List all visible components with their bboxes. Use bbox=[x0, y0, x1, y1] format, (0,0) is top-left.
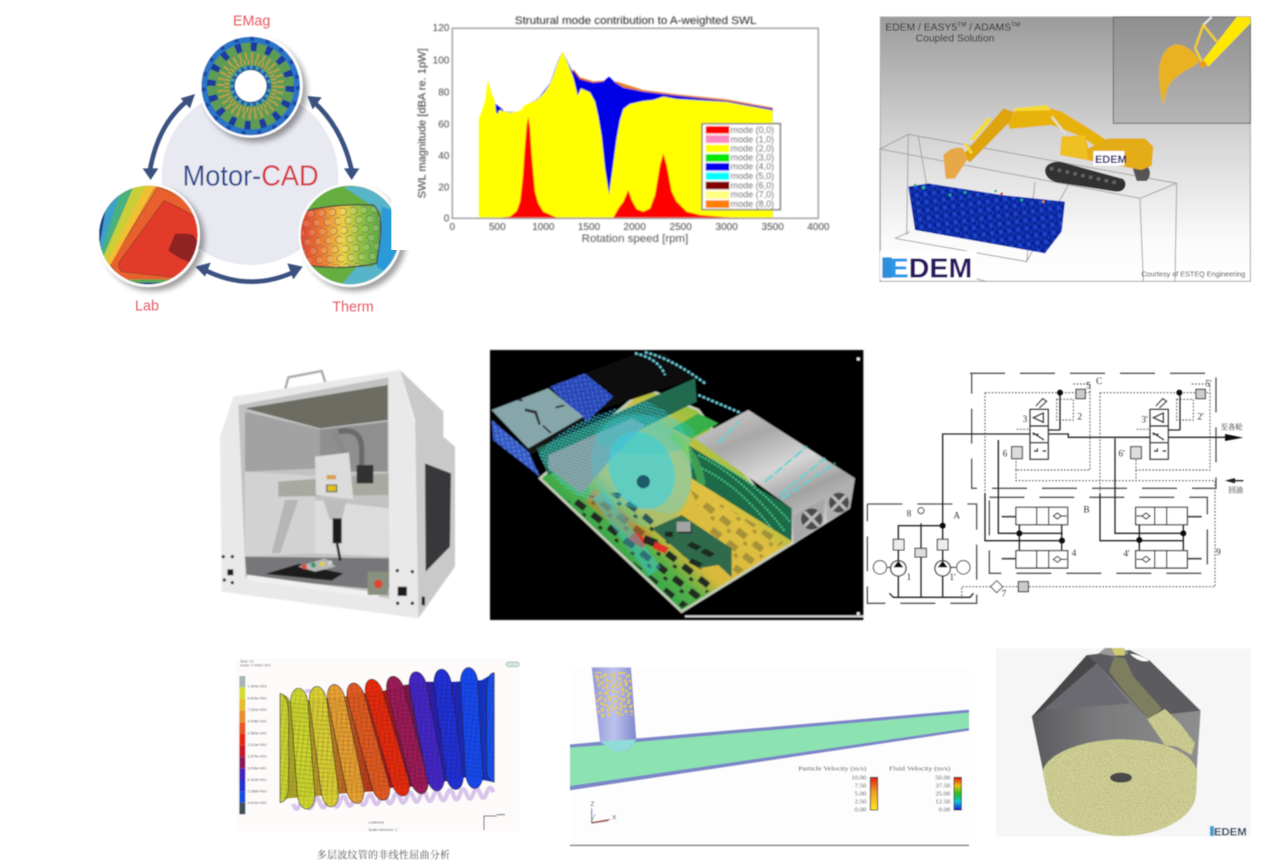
particle velocity legend: 2.50 bbox=[855, 798, 867, 805]
panel: Motor-CAD triangle diagram bbox=[97, 13, 402, 315]
title text: TM bbox=[957, 21, 966, 28]
x axis labels: 500 bbox=[489, 222, 506, 233]
falling particles bbox=[1147, 709, 1195, 755]
color legend: 4.583e+002 bbox=[247, 731, 267, 735]
schematic labels: 8 bbox=[907, 510, 912, 520]
schematic labels: 1 bbox=[907, 573, 912, 583]
legend: mode (2,0) bbox=[731, 143, 774, 153]
bellows coil bbox=[280, 667, 494, 810]
particle velocity legend: 10.00 bbox=[851, 774, 867, 781]
dark red mode layer bbox=[573, 70, 610, 83]
inlet stream bbox=[1109, 657, 1162, 720]
legend: mode (4,0) bbox=[731, 162, 774, 172]
dark top chamber bbox=[585, 352, 742, 413]
cabinet side bbox=[400, 370, 455, 618]
legend bbox=[702, 124, 780, 210]
pumps bbox=[873, 389, 1205, 593]
panel: bellows FEA result bbox=[236, 658, 519, 861]
side window bbox=[425, 463, 451, 572]
schematic labels bbox=[907, 377, 1221, 600]
color legend: 5.208e+001 bbox=[247, 766, 267, 770]
credit: Courtesy of ESTEQ Engineering bbox=[1141, 272, 1245, 279]
cylinder rods bbox=[1002, 517, 1202, 559]
schematic labels: 7 bbox=[1002, 590, 1007, 600]
color legend: 1.875e+002 bbox=[247, 755, 267, 759]
particle velocity legend: 7.50 bbox=[855, 782, 867, 789]
excavator bbox=[943, 105, 1153, 192]
schematic labels: 1' bbox=[949, 573, 956, 583]
schematic labels: 6 bbox=[1003, 450, 1008, 460]
panel: silo filling with particles bbox=[996, 648, 1251, 839]
Chinese label: return oil: 回油 bbox=[1228, 486, 1244, 495]
x axis labels: 4000 bbox=[807, 222, 830, 233]
color legend: 2.188e+002 bbox=[247, 790, 267, 794]
translucent card wall bbox=[537, 378, 697, 475]
gradient background bbox=[880, 17, 1250, 281]
dashed enclosures bbox=[867, 373, 1216, 603]
particles bbox=[594, 672, 633, 717]
daughter card bbox=[643, 515, 732, 577]
legend: mode (1,0) bbox=[731, 134, 774, 144]
fan icon right bbox=[829, 493, 849, 513]
pale plate bbox=[236, 658, 519, 832]
Chinese label: to wheels: 至各轮 bbox=[1221, 422, 1243, 431]
color legend: 5.938e+002 bbox=[247, 720, 267, 724]
y axis labels: 120 bbox=[433, 23, 450, 34]
valves bbox=[1030, 399, 1168, 459]
particle bed bbox=[908, 183, 1065, 253]
y axis labels: 20 bbox=[438, 182, 450, 193]
y axis title: SWL magnitude [dBA re. 1pW] bbox=[416, 48, 428, 198]
color legend bbox=[239, 676, 267, 814]
circuit board bbox=[540, 388, 795, 612]
fluid velocity legend: 37.50 bbox=[935, 782, 951, 789]
legend: mode (8,0) bbox=[731, 199, 774, 209]
schematic labels: 2' bbox=[1197, 412, 1204, 422]
legend: mode (7,0) bbox=[731, 190, 774, 200]
wireframe bin bbox=[880, 134, 1177, 282]
footer text bbox=[368, 820, 397, 832]
gantry beam bbox=[278, 473, 388, 497]
colored workpieces bbox=[298, 558, 336, 572]
schematic labels: C bbox=[1096, 377, 1102, 387]
y axis labels: 60 bbox=[438, 120, 450, 131]
blue flow region bbox=[550, 373, 613, 423]
junction dots bbox=[940, 390, 1186, 544]
x axis title: Rotation speed [rpm] bbox=[582, 233, 688, 245]
chart title: Strutural mode contribution to A-weighted SWL bbox=[515, 15, 756, 27]
fan wall bbox=[688, 445, 792, 541]
x axis labels: 3000 bbox=[716, 222, 738, 233]
central hole bbox=[1110, 773, 1132, 783]
schematic labels: 3' bbox=[1141, 416, 1148, 426]
schematic labels: 9 bbox=[1216, 548, 1221, 558]
circle: EMag motor cross-section bbox=[199, 34, 302, 138]
y axis labels: 40 bbox=[438, 151, 450, 162]
logo chip bbox=[506, 662, 519, 667]
label: EMag: EMag bbox=[233, 13, 270, 29]
cylinder wall bbox=[1032, 698, 1201, 797]
pilot lines bbox=[962, 384, 1215, 598]
panel: gantry dispensing machine photo bbox=[220, 370, 455, 618]
junction bbox=[600, 739, 636, 752]
power supply units bbox=[695, 410, 855, 545]
x axis labels: 1000 bbox=[532, 222, 555, 233]
color legend: 8.333e+001 bbox=[247, 778, 267, 782]
cable and head bbox=[338, 431, 362, 473]
bottom rule bbox=[570, 845, 969, 846]
axis triad bbox=[484, 815, 505, 830]
circle: Therm winding slot bbox=[297, 183, 402, 287]
fluid velocity legend: Fluid Velocity (m/s) bbox=[889, 765, 950, 772]
title text bbox=[885, 21, 1020, 44]
bottom rail bbox=[247, 577, 379, 595]
particle velocity legend: Particle Velocity (m/s) bbox=[798, 765, 866, 772]
blue mode 4,0 area bbox=[495, 52, 773, 218]
y axis labels: 100 bbox=[433, 56, 450, 67]
label: Lab: Lab bbox=[135, 299, 159, 315]
legend: mode (3,0) bbox=[731, 153, 774, 163]
circle: Lab efficiency map bbox=[97, 183, 203, 287]
cylinders bbox=[1016, 507, 1187, 568]
surface particles bbox=[914, 184, 1045, 203]
arrowheads bbox=[143, 94, 359, 279]
panel: PCB airflow simulation bbox=[490, 350, 863, 620]
frame markers bbox=[685, 358, 863, 617]
arrow: EMag to Therm bbox=[313, 102, 352, 170]
schematic labels: 3 bbox=[1023, 415, 1028, 425]
carriage box bbox=[315, 453, 353, 499]
arrow: EMag to Lab bbox=[150, 100, 188, 170]
fan icon left bbox=[801, 508, 822, 530]
schematic labels: 4' bbox=[1123, 550, 1130, 560]
side device bbox=[368, 572, 388, 595]
schematic labels: B bbox=[1083, 506, 1090, 516]
hopper cone bbox=[1032, 648, 1201, 717]
result header bbox=[240, 660, 271, 668]
footer text: Loadcase bbox=[368, 820, 384, 824]
panel: hydraulic circuit schematic bbox=[867, 373, 1244, 603]
plot frame bbox=[452, 28, 818, 218]
schematic labels: 5' bbox=[1205, 380, 1212, 390]
fluid velocity legend: 12.50 bbox=[935, 798, 951, 805]
chart: structural mode contribution to SWL bbox=[391, 0, 858, 250]
x axis labels: 2500 bbox=[670, 222, 692, 233]
x axis labels bbox=[450, 222, 830, 233]
result header: Scale: 0.000E+001 bbox=[240, 664, 271, 668]
yellow mode 2,0 area bbox=[479, 52, 773, 218]
pressure lines bbox=[889, 393, 1225, 597]
sand bed bbox=[1043, 739, 1197, 836]
particle velocity legend: 5.00 bbox=[855, 790, 867, 797]
y axis labels: 80 bbox=[438, 88, 450, 99]
legend: mode (6,0) bbox=[731, 180, 774, 190]
schematic labels: A bbox=[953, 511, 960, 521]
near-white plate bbox=[570, 667, 969, 845]
axis triad: X bbox=[612, 814, 617, 821]
EDEM logo: EDEM bbox=[890, 253, 972, 284]
heading: Motor-CAD: Motor-CAD bbox=[183, 160, 319, 192]
color legend: 7.292e+002 bbox=[247, 708, 267, 712]
x axis labels: 3500 bbox=[762, 222, 784, 233]
pale plate bbox=[996, 648, 1251, 837]
fluid velocity legend: 0.00 bbox=[939, 806, 951, 813]
schematic labels: 4 bbox=[1072, 549, 1077, 559]
vertical inlet pipe bbox=[592, 667, 636, 752]
fluid velocity legend: 50.00 bbox=[935, 774, 951, 781]
orange top layer bbox=[573, 69, 773, 112]
fluid velocity legend: 25.00 bbox=[935, 790, 951, 797]
fluid velocity legend bbox=[889, 765, 961, 813]
arrow: Lab to Therm bbox=[203, 269, 297, 282]
color legend: 3.542e+002 bbox=[247, 801, 267, 805]
axis triad bbox=[590, 801, 617, 823]
EDEM logo: EDEM bbox=[1214, 827, 1247, 839]
x axis labels: 0 bbox=[450, 222, 456, 233]
color legend: 8.646e+002 bbox=[247, 696, 267, 700]
title text: Coupled Solution bbox=[916, 33, 995, 44]
axis triad: Z bbox=[590, 801, 594, 808]
black background bbox=[490, 350, 863, 620]
y axis labels bbox=[433, 23, 450, 225]
gray block bbox=[548, 418, 645, 493]
title text: EDEM / EASY5 bbox=[885, 22, 957, 33]
nozzle bbox=[323, 500, 347, 561]
legend: mode (5,0) bbox=[731, 171, 774, 181]
color legend: 1.000e+003 bbox=[247, 685, 267, 689]
horizontal pipe bbox=[570, 710, 969, 790]
hub disc bbox=[162, 88, 338, 265]
red mode 0,0 area bbox=[479, 117, 773, 219]
white chart backing bbox=[391, 0, 858, 250]
lilac undeformed outline bbox=[293, 788, 493, 809]
panel: EDEM excavator coupled solution bbox=[880, 17, 1250, 284]
Chinese caption: 多层波纹管的非线性屈曲分析 bbox=[317, 848, 450, 861]
color legend: 3.229e+002 bbox=[247, 743, 267, 747]
inset: bucket close-up bbox=[1113, 17, 1250, 123]
schematic labels: 5 bbox=[1086, 382, 1091, 392]
y axis labels: 0 bbox=[444, 214, 450, 225]
swirl of streamlines bbox=[538, 397, 710, 572]
top-left heatsink bbox=[492, 388, 587, 477]
interior bbox=[238, 377, 389, 598]
particle velocity legend: 0.00 bbox=[855, 806, 867, 813]
label: Therm: Therm bbox=[332, 299, 374, 315]
schematic labels: 6' bbox=[1118, 450, 1125, 460]
result header: Step: 10 bbox=[240, 660, 254, 664]
panel: particle-laden pipe flow bbox=[570, 667, 969, 846]
footer text: Scale minimum: 1 bbox=[368, 828, 397, 832]
title text: TM bbox=[1011, 21, 1020, 28]
particle velocity legend bbox=[798, 765, 878, 813]
outlet arrow bbox=[1225, 434, 1243, 441]
schematic labels: 2 bbox=[1077, 412, 1082, 422]
frame holes bbox=[222, 555, 425, 605]
legend: mode (0,0) bbox=[731, 125, 774, 135]
cabinet front frame bbox=[220, 370, 418, 618]
x axis labels: 1500 bbox=[578, 222, 601, 233]
handle bbox=[285, 371, 326, 390]
title text: / ADAMS bbox=[966, 22, 1011, 33]
logo on cab: EDEM bbox=[1095, 154, 1127, 166]
return arrow bbox=[1225, 478, 1243, 483]
lilac upper outline bbox=[306, 689, 310, 692]
x axis labels: 2000 bbox=[624, 222, 646, 233]
